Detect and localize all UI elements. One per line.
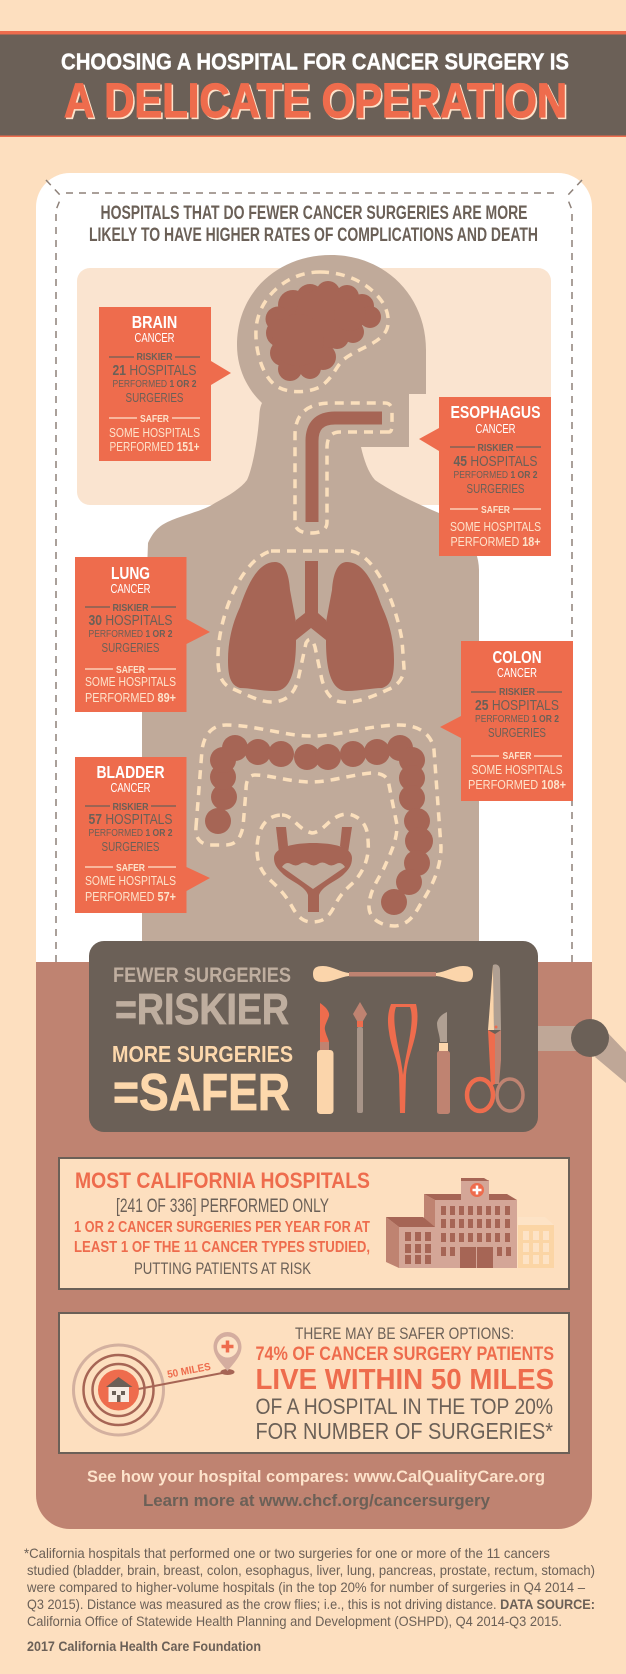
callout: lung cancer: PERFORMED 1 OR 2 [88,629,173,640]
dashed outline: bladder [257,814,368,922]
callout: brain cancer: SOME HOSPITALS [109,425,200,440]
risk dividers [85,805,176,807]
callout: esophagus cancer: PERFORMED 1 OR 2 [454,470,538,481]
callout: colon cancer: CANCER [497,666,537,680]
callout: esophagus cancer: RISKIER [478,443,514,454]
callout: bladder cancer: SAFER [116,863,146,874]
text: riskier: =RISKIER [115,985,289,1034]
callout: lung cancer: SOME HOSPITALS [85,674,176,689]
callout: esophagus cancer [419,397,551,556]
link: learn more: Learn more at www.chcf.org/cancersurgery [143,1491,491,1510]
icon: hospital building [386,1178,554,1268]
icon: home target with radius rings [74,1345,164,1435]
icon: lamp arm connector [530,1019,626,1083]
text: fewer surgeries: FEWER SURGERIES [113,963,291,987]
subheading [89,203,538,246]
dashed outline: brain [256,272,388,392]
callout: esophagus cancer: PERFORMED 18+ [450,534,541,549]
panel: brown lower card [36,962,592,1529]
callout: bladder cancer: PERFORMED 57+ [85,889,176,904]
organ: bladder [274,827,352,912]
footnote: California Office of Statewide Health Planning and Development (OSHPD), Q4 2014-Q3 2015. [27,1613,562,1629]
title line 2 with shadow: A DELICATE OPERATION [64,75,567,128]
callout: colon cancer: SOME HOSPITALS [472,762,563,777]
callout: brain cancer: 21 HOSPITALS [112,363,196,379]
callout: esophagus cancer: ESOPHAGUS [450,402,540,422]
dashed outline: lungs [218,551,404,702]
callout: esophagus cancer: SOME HOSPITALS [450,519,541,534]
callout: lung cancer: SURGERIES [102,640,160,655]
callout: esophagus cancer: SAFER [481,505,511,516]
large emphasised text: LIVE WITHIN 50 MILES [256,1364,554,1396]
callout: bladder cancer: RISKIER [112,802,149,813]
panel: safer options [59,1313,569,1453]
callout: colon cancer: COLON [492,647,542,667]
callout: colon cancer: SAFER [502,751,532,762]
panel: white upper card [36,173,592,962]
text: safer: =SAFER [113,1064,290,1122]
callout: brain cancer: RISKIER [136,352,173,363]
callout: esophagus cancer: CANCER [476,422,516,436]
risk dividers [471,691,562,693]
callout: brain cancer: SAFER [140,414,170,425]
icon: scalpel with brown handle [437,1012,450,1114]
label: 50 miles: 50 MILES [166,1361,212,1381]
heading: MOST CALIFORNIA HOSPITALS [75,1168,370,1193]
icon: swab [313,966,473,982]
callout: esophagus cancer: 45 HOSPITALS [454,454,538,470]
emphasised text: LEAST 1 OF THE 11 CANCER TYPES STUDIED, [74,1239,370,1256]
light background panel behind head [77,268,551,505]
callout: brain cancer: BRAIN [132,312,177,332]
text line: OF A HOSPITAL IN THE TOP 20% [256,1394,553,1419]
callout: brain cancer [99,307,231,461]
callout: brain cancer: CANCER [134,331,174,345]
footnote: *California hospitals that performed one or two surgeries for one or more of the 11 cancers [24,1545,550,1561]
title line 2 with shadow: A DELICATE OPERATION [66,76,568,130]
callout: colon cancer: 25 HOSPITALS [475,698,559,714]
organ: esophagus [312,418,382,522]
human body silhouette [142,255,479,960]
emphasised text: 74% OF CANCER SURGERY PATIENTS [256,1344,554,1365]
footnote [24,1545,595,1629]
organ: lungs [228,561,394,691]
callout: bladder cancer: BLADDER [96,762,165,782]
callout: bladder cancer: CANCER [110,781,150,795]
callout: colon cancer: SURGERIES [488,725,546,740]
icon: hospital location pin [214,1332,242,1375]
risk dividers [450,446,541,448]
callout: brain cancer: PERFORMED 1 OR 2 [112,379,197,390]
text line: FOR NUMBER OF SURGERIES* [256,1418,553,1444]
callout: lung cancer: SAFER [116,665,146,676]
callout: bladder cancer: PERFORMED 1 OR 2 [88,828,173,839]
footnote: Q3 2015). Distance was measured as the crow flies; i.e., this is not driving distance. DATA SOURCE: [27,1596,595,1612]
callout: lung cancer: CANCER [110,582,150,596]
text line: THERE MAY BE SAFER OPTIONS: [295,1325,514,1343]
link: compare hospital: See how your hospital compares: www.CalQualityCare.org [87,1467,545,1486]
organ: colon [205,735,433,915]
icon: forceps [388,1004,418,1113]
callout: lung cancer: RISKIER [112,603,149,614]
callout: lung cancer: 30 HOSPITALS [88,613,172,629]
dashed outline: colon [196,725,441,926]
panel: fewer vs more surgeries [89,941,538,1132]
dashed inner frame [46,180,582,962]
callout: lung cancer: LUNG [111,563,150,583]
callout: bladder cancer: 57 HOSPITALS [88,812,172,828]
header banner [0,31,626,137]
callout: brain cancer: SURGERIES [126,390,184,405]
callout: brain cancer: PERFORMED 151+ [110,439,200,454]
callout: colon cancer: PERFORMED 108+ [468,777,566,792]
callout: colon cancer: RISKIER [499,687,536,698]
distance line [138,1372,228,1389]
callout: lung cancer: PERFORMED 89+ [85,690,176,705]
callout: lung cancer [75,557,210,712]
icon: scissors [467,964,523,1111]
callout: bladder cancer: SURGERIES [102,839,160,854]
icon: probe [353,1002,367,1113]
panel: most California hospitals [59,1158,569,1289]
callout: bladder cancer [75,757,210,913]
icon: scalpel with cream handle [317,1003,334,1114]
footnote: were compared to higher-volume hospitals (in the top 20% for number of surgeries in Q4 2014 – [26,1579,585,1595]
emphasised text: 1 OR 2 CANCER SURGERIES PER YEAR FOR AT [74,1219,370,1236]
callout: colon cancer: PERFORMED 1 OR 2 [475,714,559,725]
dashed outline: esophagus [295,403,392,533]
callout: bladder cancer: SOME HOSPITALS [85,873,176,888]
callout: esophagus cancer: SURGERIES [466,481,525,496]
risk dividers [109,356,200,358]
credit: 2017 California Health Care Foundation [27,1638,261,1654]
organ: brain [266,281,381,381]
footnote: studied (bladder, brain, breast, colon, esophagus, liver, lung, pancreas, prostate, rectum, stomach) [27,1562,595,1578]
text line: PUTTING PATIENTS AT RISK [134,1259,312,1278]
risk dividers [85,606,176,608]
emphasised text [74,1219,370,1256]
text: more surgeries: MORE SURGERIES [112,1041,293,1067]
callout: colon cancer [440,641,573,801]
text line: [241 OF 336] PERFORMED ONLY [116,1196,329,1217]
